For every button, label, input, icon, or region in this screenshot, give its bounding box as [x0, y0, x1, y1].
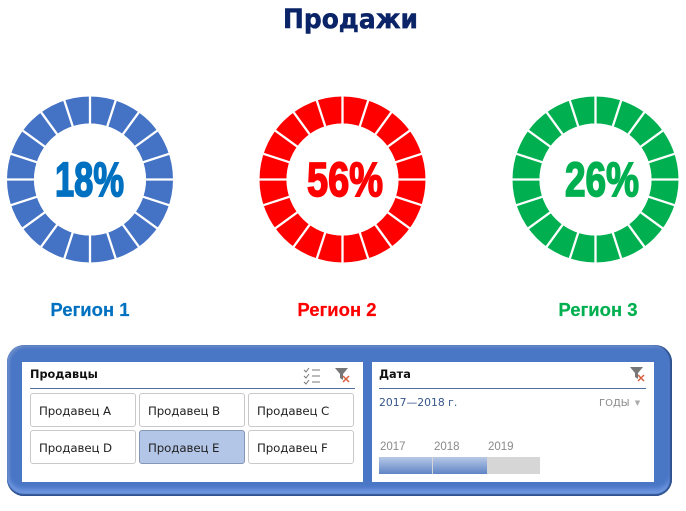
panel: date timeline [372, 362, 654, 482]
label: region 2: Регион 2 [297, 299, 377, 320]
header rule [30, 388, 355, 389]
button: seller A [30, 393, 136, 427]
button: seller B [139, 393, 245, 427]
donut: region 3: 26% [565, 154, 639, 207]
button: seller D: Продавец D [39, 441, 112, 455]
selected 2017 [379, 457, 432, 474]
button: seller E selected [139, 430, 245, 464]
button: seller F: Продавец F [257, 441, 328, 455]
year label 2019: 2019 [488, 441, 514, 453]
level selector: ГОДЫ ▼ [599, 398, 640, 409]
button: seller A: Продавец A [39, 404, 111, 418]
timeline bar [379, 457, 540, 474]
button: seller D [30, 430, 136, 464]
panel: sellers slicer [22, 362, 363, 482]
label: region 1: Регион 1 [50, 299, 130, 320]
year label 2018: 2018 [434, 441, 460, 453]
donut charts [7, 96, 678, 262]
selected range: 2017—2018 г. [379, 396, 457, 409]
button: seller F [248, 430, 354, 464]
heading: date: Дата [379, 368, 411, 381]
button: seller C: Продавец C [257, 404, 329, 418]
donut: region 2 [256, 94, 428, 266]
button: seller C [248, 393, 354, 427]
button: seller B: Продавец B [148, 404, 220, 418]
label: region 3: Регион 3 [558, 299, 638, 320]
button: seller E selected: Продавец E [148, 441, 219, 455]
icon: multi-select [304, 368, 320, 385]
icon: clear filter [630, 367, 644, 382]
selected 2018 [433, 457, 487, 474]
donut: region 1: 18% [55, 154, 124, 207]
donut: region 2: 56% [307, 154, 383, 207]
icon: clear filter [335, 368, 350, 382]
donut: region 1 [4, 94, 176, 266]
year label 2017: 2017 [380, 441, 406, 453]
header rule [379, 388, 646, 389]
donut: region 3 [510, 94, 682, 266]
panel: filter dashboard [7, 345, 672, 496]
title: Продажи [283, 4, 418, 35]
heading: sellers: Продавцы [30, 368, 98, 381]
